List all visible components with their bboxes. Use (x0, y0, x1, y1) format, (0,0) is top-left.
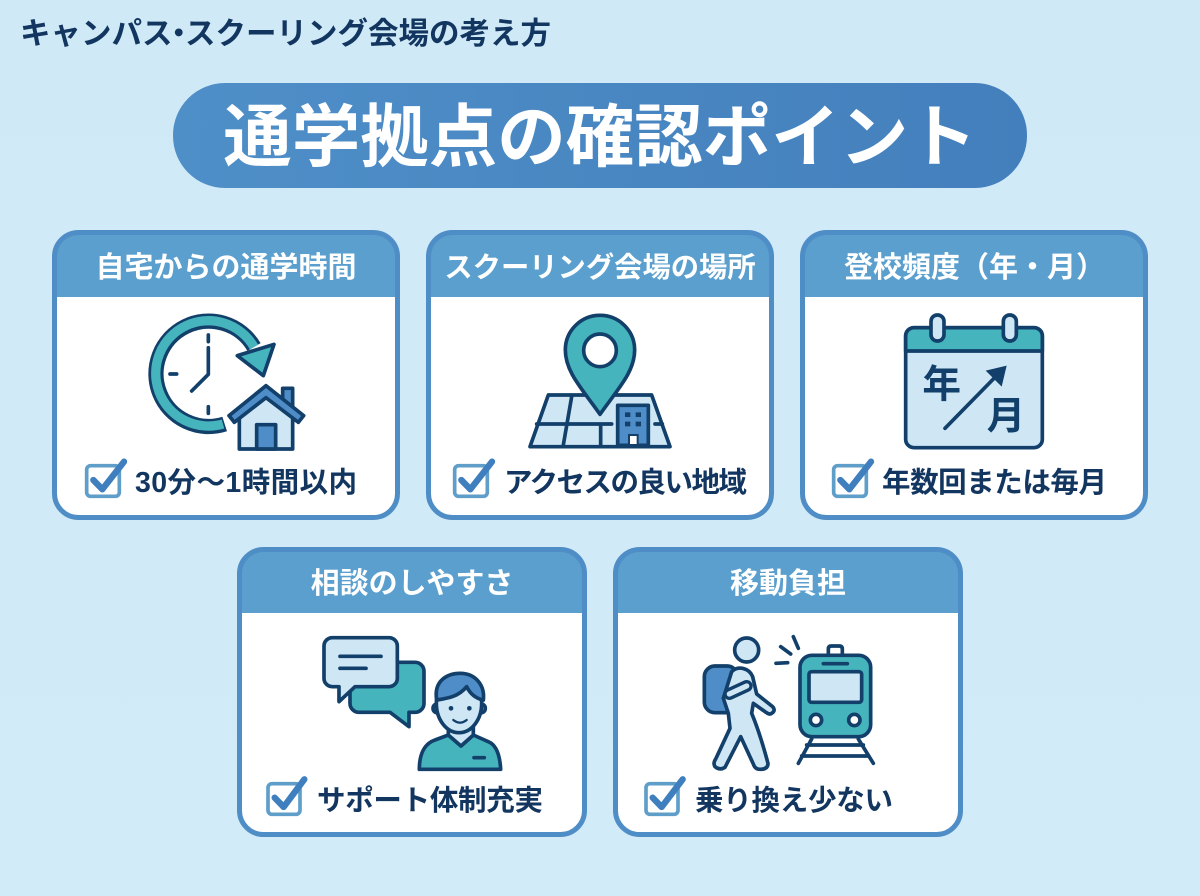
icon: calendar: 月 (987, 395, 1025, 438)
check item: venue location: アクセスの良い地域 (504, 467, 747, 499)
top heading: キャンパス・スクーリング会場の考え方 (20, 17, 551, 51)
icon: calendar (906, 315, 1042, 448)
icon: calendar: 年 (922, 364, 961, 407)
panel: attendance frequency (802, 232, 1146, 518)
panel: venue location (428, 232, 772, 518)
panel: ease of consultation (240, 550, 584, 834)
title banner (173, 83, 1027, 188)
check item: commute time: 30分～1時間以内 (135, 467, 357, 499)
check item: attendance frequency: 年数回または毎月 (882, 467, 1107, 499)
heading: ease of consultation: 相談のしやすさ (311, 567, 513, 600)
panel: travel burden (616, 550, 960, 834)
title banner: 通学拠点の確認ポイント (223, 99, 977, 176)
heading: travel burden: 移動負担 (730, 567, 846, 600)
heading: commute time: 自宅からの通学時間 (95, 251, 357, 284)
icon: walker and train (704, 637, 873, 769)
icon: chat and advisor (324, 638, 501, 769)
check item: ease of consultation (268, 779, 543, 817)
heading: venue location: スクーリング会場の場所 (444, 251, 756, 283)
check item: travel burden (646, 779, 893, 817)
check item: ease of consultation: サポート体制充実 (317, 785, 543, 817)
icon: map pin and building (530, 315, 670, 447)
icon: clock and house (156, 321, 304, 449)
panel: commute time (54, 232, 398, 518)
heading: attendance frequency: 登校頻度（年・月） (844, 251, 1105, 284)
check item: travel burden: 乗り換え少ない (695, 785, 893, 817)
